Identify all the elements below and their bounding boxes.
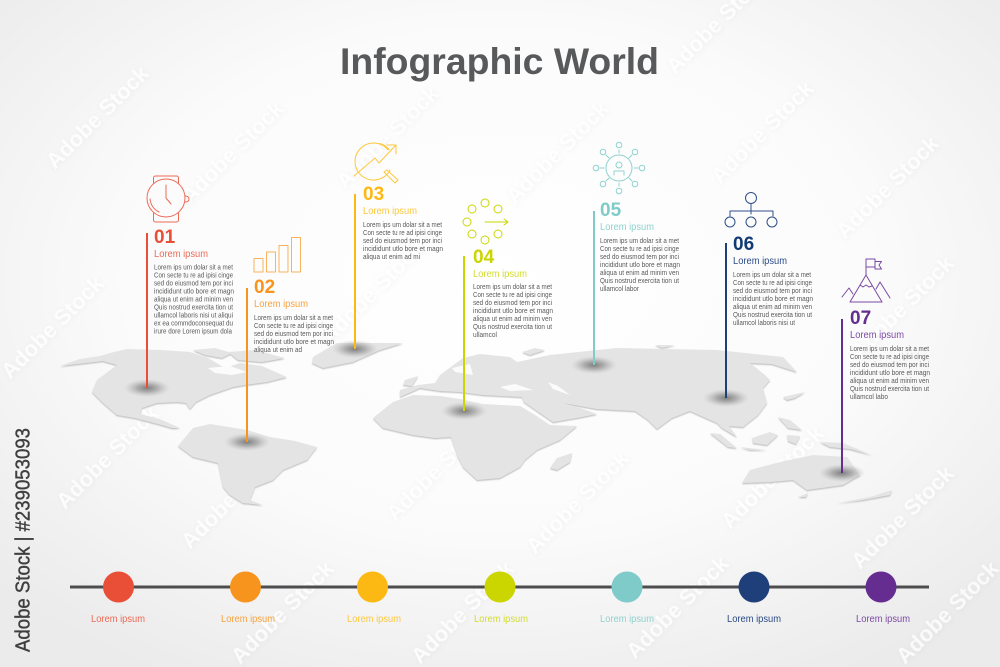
panel: 02: 02 — [254, 277, 275, 298]
panel: 01: ex ea commdoconsequat du — [154, 320, 233, 328]
watermarks: Adobe Stock — [176, 95, 289, 209]
location shadows — [124, 340, 865, 482]
panel: 02 — [247, 238, 334, 442]
panel: 01: Lorem ips um dolar sit a met — [154, 264, 233, 272]
panel: 03: Con secte tu re ad ipisi cinge — [363, 230, 442, 237]
panel: 01: sed do eiusmod tem por inci — [154, 280, 233, 288]
panel: 05: sed do eiusmod tem por inci — [600, 254, 679, 261]
panel: 01: incididunt utlo bore et magn — [154, 288, 234, 296]
panel: 05: Lorem ips um dolar sit a met — [600, 238, 679, 245]
panel: 06: Quis nostrud exercita tion ut — [733, 312, 812, 319]
panel: 03: Lorem ipsum — [363, 205, 417, 217]
watermarks: Adobe Stock — [716, 420, 829, 534]
stock credit: Adobe Stock | #239053093 — [12, 428, 34, 652]
panel: 07: 07 — [850, 308, 871, 329]
panel: 05: aliqua ut enim ad minim ven — [600, 270, 679, 277]
watermarks: Adobe Stock — [831, 130, 944, 244]
watermarks: Adobe Stock — [226, 555, 339, 667]
panel: 03: sed do eiusmod tem por inci — [363, 238, 442, 245]
watermarks: Adobe Stock — [706, 75, 819, 189]
timeline: Lorem ipsum — [474, 613, 528, 625]
panel: 06: aliqua ut enim ad minim ven — [733, 304, 812, 311]
panel: 05: ullamcol labor — [600, 286, 640, 293]
panel: 03 — [354, 143, 443, 349]
panel: 01: aliqua ut enim ad minim ven — [154, 296, 233, 304]
panel: 02: Lorem ips um dolar sit a met — [254, 315, 333, 322]
watermarks: Adobe Stock — [406, 555, 519, 667]
panel: 07 — [842, 259, 930, 473]
panel: 04 — [463, 199, 553, 411]
watermarks: Adobe Stock — [316, 235, 429, 349]
panel: 03: aliqua ut enim ad mi — [363, 254, 420, 261]
panel: 03: 03 — [363, 184, 384, 205]
watermarks: Adobe Stock — [621, 550, 734, 664]
panel: 02: Lorem ipsum — [254, 298, 308, 310]
panel: 04: Lorem ipsum — [473, 268, 527, 280]
panel: 02: Con secte tu re ad ipisi cinge — [254, 323, 333, 330]
inland seas — [208, 364, 570, 395]
panel: 06: ullamcol laboris nisi ut — [733, 320, 795, 327]
panel: 06: sed do eiusmod tem por inci — [733, 288, 812, 295]
panel: 05: Con secte tu re ad ipisi cinge — [600, 246, 679, 253]
panel: 06: 06 — [733, 234, 754, 255]
panel: 04: Lorem ips um dolar sit a met — [473, 284, 552, 291]
panel: 07: incididunt utlo bore et magn — [850, 370, 930, 377]
panel: 05: 05 — [600, 200, 622, 221]
watermarks: Adobe Stock — [41, 60, 154, 174]
panel: 04: Con secte tu re ad ipisi cinge — [473, 292, 552, 299]
watermarks: Adobe Stock — [846, 460, 959, 574]
panel: 02: aliqua ut enim ad — [254, 347, 302, 354]
panel: 06: Lorem ips um dolar sit a met — [733, 272, 811, 279]
watermarks: Adobe Stock — [381, 412, 494, 526]
panel: 05: incididunt utlo bore et magn — [600, 262, 680, 269]
panel: 05: Quis nostrud exercita tion ut — [600, 278, 679, 285]
panel: 06: Lorem ipsum — [733, 255, 787, 267]
panel: 04: incididunt utlo bore et magn — [473, 308, 553, 315]
panel: 04: sed do eiusmod tem por inci — [473, 300, 552, 307]
panel: 05: Lorem ipsum — [600, 221, 654, 233]
panel: 04: Quis nostrud exercita tion ut — [473, 324, 552, 331]
timeline: Lorem ipsum — [91, 613, 145, 625]
panel: 02: incididunt utlo bore et magn — [254, 339, 334, 346]
panel: 01: irure dore Lorem ipsum dola — [154, 328, 232, 336]
panel: 06 — [725, 192, 813, 398]
panel: 07: aliqua ut enim ad minim ven — [850, 378, 929, 385]
panel: 04: aliqua ut enim ad minim ven — [473, 316, 552, 323]
panel: 07: ullamcol labo — [850, 394, 888, 401]
panel: 01: Lorem ipsum — [154, 248, 208, 260]
watermarks: Adobe Stock — [846, 250, 959, 364]
watermarks: Adobe Stock — [51, 400, 164, 514]
watermarks: Adobe Stock — [176, 440, 289, 554]
world map — [60, 343, 892, 505]
panel: 04: 04 — [473, 247, 495, 268]
panel: 07: Quis nostrud exercita tion ut — [850, 386, 929, 393]
panel: 01: ullamcol laboris nisi ut aliqui — [154, 312, 233, 320]
timeline: Lorem ipsum — [221, 613, 275, 625]
panel: 03: incididunt utlo bore et magn — [363, 246, 443, 253]
panel: 07: Lorem ipsum — [850, 329, 904, 341]
panel: 07: Lorem ips um dolar sit a met — [850, 346, 929, 353]
timeline: Lorem ipsum — [727, 613, 781, 625]
panel: 01: Quis nostrud exercita tion ut — [154, 304, 233, 312]
panel: 04: ullamcol — [473, 332, 497, 339]
timeline: Lorem ipsum — [856, 613, 910, 625]
watermarks: Adobe Stock — [521, 445, 634, 559]
panel: 07: Con secte tu re ad ipisi cinge — [850, 354, 929, 361]
panel: 02: sed do eiusmod tem por inci — [254, 331, 333, 338]
watermarks: Adobe Stock — [331, 80, 444, 194]
watermarks: Adobe Stock — [501, 95, 614, 209]
panel: 06: Con secte tu re ad ipisi cinge — [733, 280, 812, 287]
panel: 03: Lorem ips um dolar sit a met — [363, 222, 442, 229]
timeline: Lorem ipsum — [347, 613, 401, 625]
panel: 06: incididunt utlo bore et magn — [733, 296, 813, 303]
panel: 01: Con secte tu re ad ipisi cinge — [154, 272, 233, 280]
panel: 05 — [593, 142, 680, 365]
panel: 01: 01 — [154, 227, 176, 248]
title: Infographic World — [340, 41, 659, 82]
panel: 07: sed do eiusmod tem por inci — [850, 362, 929, 369]
panel: 01 — [147, 176, 234, 388]
timeline — [70, 572, 929, 625]
timeline: Lorem ipsum — [600, 613, 654, 625]
